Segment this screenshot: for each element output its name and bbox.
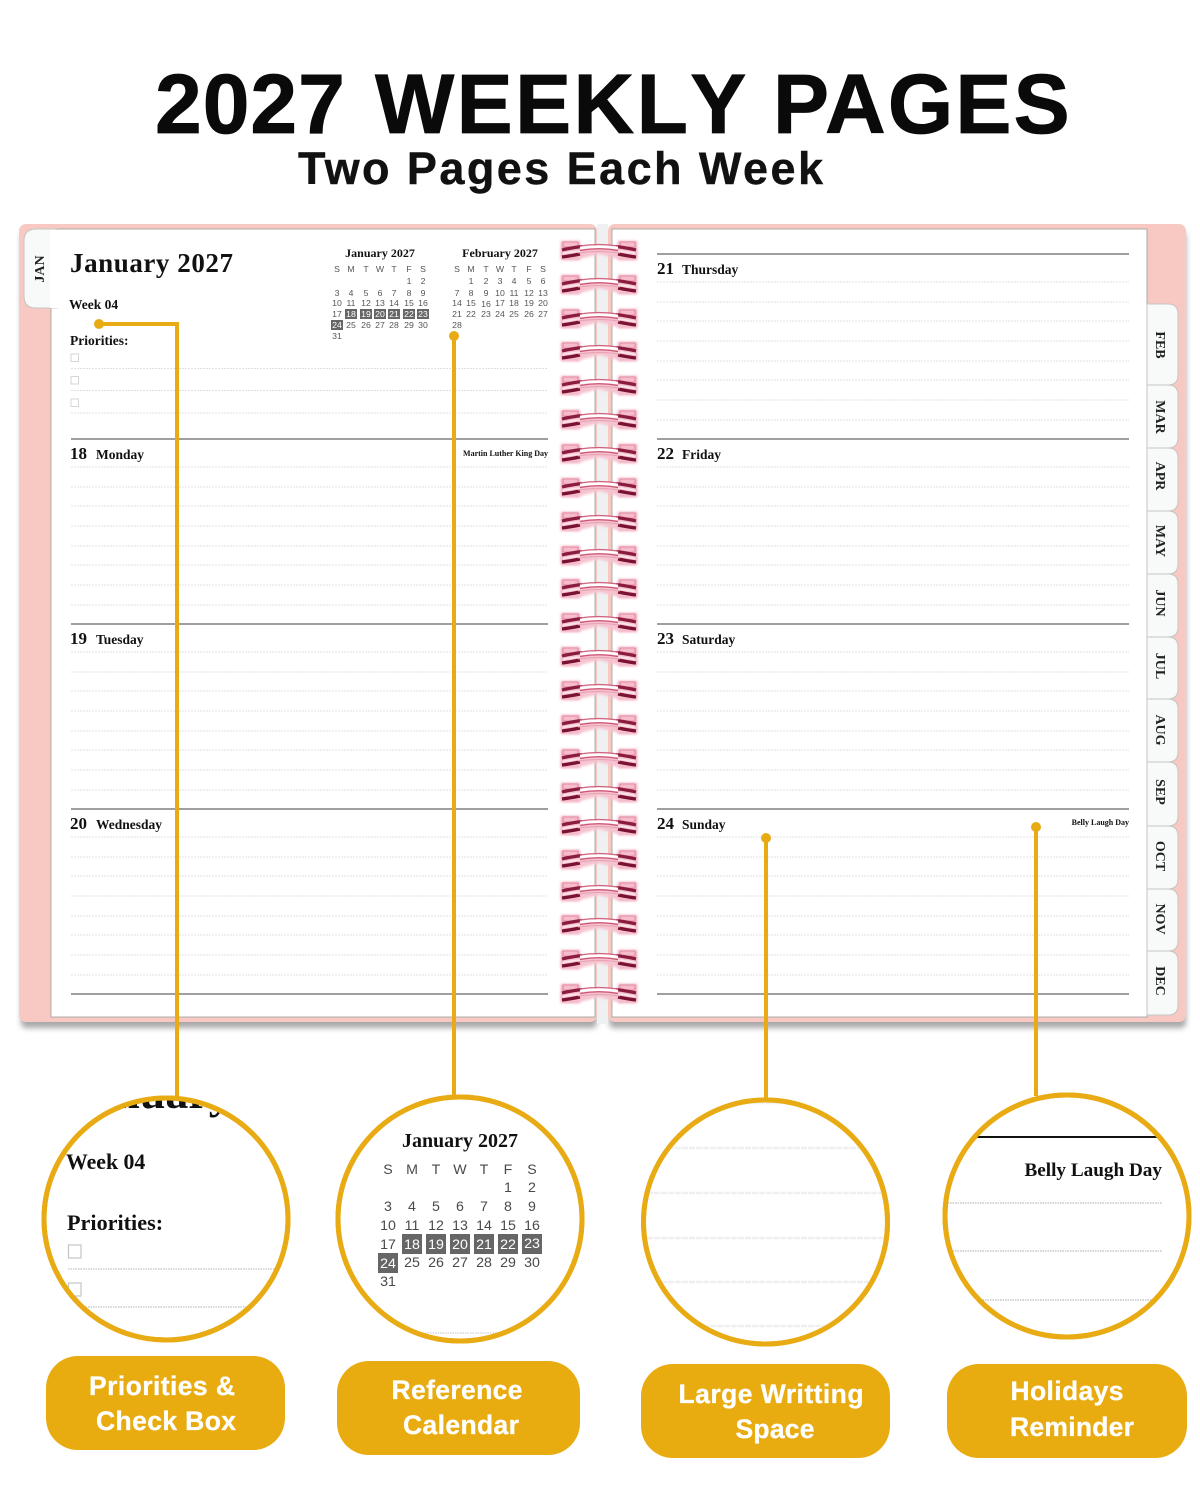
mini calendar: February: 6 [541,276,546,286]
mini calendar: January: S [420,264,426,274]
mini calendar: February: 4 [512,276,517,286]
mini calendar: January: 7 [392,288,397,298]
month tabs: NOV [1152,903,1167,935]
magnifier: reference calendar: 13 [452,1218,468,1234]
label: priorities & check box: Priorities & [89,1371,235,1401]
magnifier: reference calendar: M [406,1162,418,1178]
right page [612,229,1147,1017]
magnifier: reference calendar [338,1097,582,1341]
label: priorities & check box: Check Box [96,1406,236,1436]
mini calendar: February: 3 [498,276,503,286]
label: priorities & check box [46,1356,285,1450]
month tabs: AUG [1152,714,1167,746]
priorities block [70,333,548,413]
day: 21 Thursday: Thursday [682,262,739,277]
day: 22 Friday: Friday [682,447,721,462]
magnifier: reference calendar: 6 [456,1199,464,1215]
month tabs: DEC [1152,966,1167,996]
label: reference calendar [337,1361,580,1455]
month tabs: SEP [1152,779,1167,805]
title: 2027 [155,57,346,151]
mini calendar: February: 1 [469,276,474,286]
magnifier: reference calendar: 22 [500,1237,516,1253]
spine [597,224,608,1024]
tab: JAN: JAN [33,255,48,283]
mini calendar: January: 13 [375,298,385,308]
mini calendar: January: 26 [361,320,371,330]
mini calendar: January: F [406,264,412,274]
magnifier: reference calendar: W [453,1162,467,1178]
magnifier: reference calendar: 11 [405,1218,419,1234]
magnifier: reference calendar: 29 [500,1255,516,1271]
day: 24 Sunday [657,809,1129,994]
mini calendar: January: 15 [404,298,414,308]
mini calendar: January: 5 [364,288,369,298]
magnifier: reference calendar: 27 [452,1255,468,1271]
mini calendar: January: 18 [346,309,356,319]
mini calendar: February: 17 [495,298,505,308]
planner: open notebook [19,224,1186,1028]
mini calendar: February: 23 [481,309,491,319]
mini calendar: January: T [391,264,397,274]
label: large writting space [641,1364,890,1458]
month tabs: MAY [1152,525,1167,557]
title: PAGES [773,57,1072,151]
mini calendar: February: 14 [452,298,462,308]
mini calendar: February: 22 [466,309,476,319]
mini calendar: February: S [454,264,460,274]
mini calendar: February: 11 [509,288,519,298]
mini calendar: February: February 2027 [462,246,538,260]
magnifier: reference calendar: 28 [476,1255,492,1271]
spiral binding [561,241,637,1003]
mini calendar: January: 3 [335,288,340,298]
mini calendar: January: 1 [407,276,412,286]
mini calendar: February: 13 [538,288,548,298]
mini calendar: January: January 2027 [345,246,415,260]
mini calendar: January: 6 [378,288,383,298]
magnifier: reference calendar: 10 [380,1218,396,1234]
text: week number: Week 04 [69,297,118,312]
mini calendar: January: 4 [349,288,354,298]
mini calendar: January: 27 [375,320,385,330]
day: 22 Friday: 22 [657,444,674,463]
magnifier: priorities: January [68,1067,232,1118]
priorities block: Priorities: [70,333,128,348]
magnifier: reference calendar: T [432,1162,441,1178]
day: 24 Sunday: Sunday [682,817,726,832]
magnifier: holidays: Belly Laugh Day [1024,1160,1162,1181]
month tabs: APR [1152,462,1167,491]
mini calendar: February: 26 [524,309,534,319]
magnifier: priorities: Week 04 [66,1150,145,1174]
magnifier: reference calendar: 2 [528,1180,536,1196]
magnifier: reference calendar: 17 [380,1237,396,1253]
mini calendar: February: 16 [481,299,491,309]
magnifier: reference calendar: T [480,1162,489,1178]
month tabs: FEB [1152,331,1167,359]
mini calendar: January: 2 [421,276,426,286]
mini calendar: January: 30 [418,320,428,330]
label: holidays reminder [947,1364,1187,1458]
day: 24 Sunday: Belly Laugh Day [1072,818,1129,827]
cover: left [19,224,597,1022]
magnifier: reference calendar: 20 [452,1237,468,1253]
magnifier: priorities [44,1067,290,1340]
day: 18 Monday: Monday [96,447,144,462]
magnifier: reference calendar: 14 [476,1218,492,1234]
mini calendar: January: 11 [346,298,356,308]
mini calendar: January: W [376,264,385,274]
day: 23 Saturday: 23 [657,629,674,648]
day: 21 Thursday [657,254,1129,420]
connector: priorities [94,319,177,1098]
mini calendar: January: 28 [389,320,399,330]
magnifier: reference calendar: 1 [504,1180,512,1196]
mini calendar: January: 22 [404,309,414,319]
label: holidays reminder: Reminder [1010,1412,1134,1442]
day: 22 Friday [657,439,1129,605]
label: reference calendar: Reference [392,1375,522,1405]
day: 19 Tuesday [70,624,548,790]
magnifier: reference calendar: 5 [432,1199,440,1215]
mini calendar: January: 31 [332,331,342,341]
magnifier: reference calendar: 21 [476,1237,492,1253]
mini calendar: January: S [334,264,340,274]
mini calendar: February: 20 [538,298,548,308]
magnifier: reference calendar: 18 [404,1237,420,1253]
mini calendar: January: 16 [418,298,428,308]
label: large writting space: Space [736,1414,814,1444]
left page [24,229,595,1017]
title: WEEKLY [375,57,749,151]
magnifier: reference calendar: 8 [504,1199,512,1215]
day: 18 Monday [70,439,548,605]
label: holidays reminder: Holidays [1010,1376,1124,1406]
magnifier: writing space [640,1100,890,1344]
connector: holidays [1031,822,1041,1096]
magnifier: reference calendar: 31 [380,1274,396,1290]
mini calendar: January: 23 [418,309,428,319]
day: 24 Sunday: 24 [657,814,674,833]
mini calendar: January: 14 [389,298,399,308]
mini calendar: February: 10 [495,288,505,298]
magnifier: priorities: Priorities: [67,1210,163,1235]
mini calendar: February: 5 [527,276,532,286]
mini calendar: February: 19 [524,298,534,308]
label: reference calendar: Calendar [403,1410,519,1440]
subtitle: Two Pages Each Week [298,143,824,194]
magnifier: reference calendar: 9 [528,1199,536,1215]
mini calendar: January: 10 [332,298,342,308]
magnifier: reference calendar: 30 [524,1255,540,1271]
magnifier: reference calendar: January 2027 [402,1130,518,1152]
mini calendar: February: F [526,264,532,274]
magnifier: reference calendar: 26 [428,1255,444,1271]
magnifier: reference calendar: 12 [428,1218,444,1234]
magnifier: reference calendar: S [527,1162,537,1178]
mini calendar: January: 20 [375,309,385,319]
mini calendar: February: 7 [455,288,460,298]
day: 18 Monday: 18 [70,444,87,463]
magnifier: reference calendar: 15 [500,1218,516,1234]
mini calendar: February: W [496,264,505,274]
heading: January 2027: January 2027 [70,248,233,278]
mini calendar: February: 12 [524,288,534,298]
day: 20 Wednesday [70,809,548,994]
mini calendar: January: 25 [346,320,356,330]
mini calendar: February: 27 [538,309,548,319]
magnifier: reference calendar: 19 [428,1237,444,1253]
month tabs: JUL [1152,653,1167,679]
day: 20 Wednesday: Wednesday [96,817,162,832]
mini calendar: January: 9 [421,288,426,298]
mini calendar: February: T [511,264,517,274]
day: 20 Wednesday: 20 [70,814,87,833]
connector: writing space [761,833,771,1100]
magnifier: reference calendar: S [383,1162,393,1178]
mini calendar: February: 8 [469,288,474,298]
day: 18 Monday: Martin Luther King Day [463,449,548,458]
mini calendar: February: 25 [509,309,519,319]
mini calendar: February: 28 [452,320,462,330]
mini calendar: February: 18 [509,298,519,308]
month tabs: OCT [1152,841,1167,872]
mini calendar: February [452,246,548,330]
mini calendar: January: 21 [389,309,399,319]
day: 23 Saturday [657,624,1129,790]
mini calendar: January [331,246,429,341]
mini calendar: January: M [347,264,355,274]
mini calendar: January: 29 [404,320,414,330]
cover: right [608,224,1186,1022]
magnifier: reference calendar: 3 [384,1199,392,1215]
day: 21 Thursday: 21 [657,259,674,278]
magnifier: reference calendar: 23 [524,1236,540,1252]
mini calendar: January: 19 [361,309,371,319]
label: large writting space: Large Writting [678,1379,864,1409]
mini calendar: February: 15 [466,298,476,308]
day: 19 Tuesday: Tuesday [96,632,144,647]
mini calendar: January: 12 [361,298,371,308]
mini calendar: January: 8 [407,288,412,298]
month tabs [1147,304,1178,1015]
mini calendar: January: T [363,264,369,274]
tab: JAN [24,229,60,308]
mini calendar: February: 24 [495,309,505,319]
mini calendar: February: S [540,264,546,274]
mini calendar: January: 17 [332,309,342,319]
magnifier: reference calendar: 25 [404,1255,420,1271]
magnifier: reference calendar: 24 [380,1256,396,1272]
day: 19 Tuesday: 19 [70,629,87,648]
magnifier: reference calendar: 7 [480,1199,488,1215]
day: 23 Saturday: Saturday [682,632,736,647]
mini calendar: January: 24 [332,320,342,330]
magnifier: reference calendar: F [504,1162,513,1178]
mini calendar: February: 21 [452,309,462,319]
connector: reference calendar [449,331,459,1098]
mini calendar: February: T [483,264,489,274]
month tabs: MAR [1152,400,1167,435]
cover shadow [21,232,1186,1028]
month tabs: JUN [1152,589,1167,617]
magnifier: holidays [940,1095,1189,1337]
magnifier: reference calendar: 4 [408,1199,416,1215]
mini calendar: February: M [467,264,475,274]
mini calendar: February: 9 [484,288,489,298]
magnifier: reference calendar: 16 [524,1218,540,1234]
mini calendar: February: 2 [484,276,489,286]
